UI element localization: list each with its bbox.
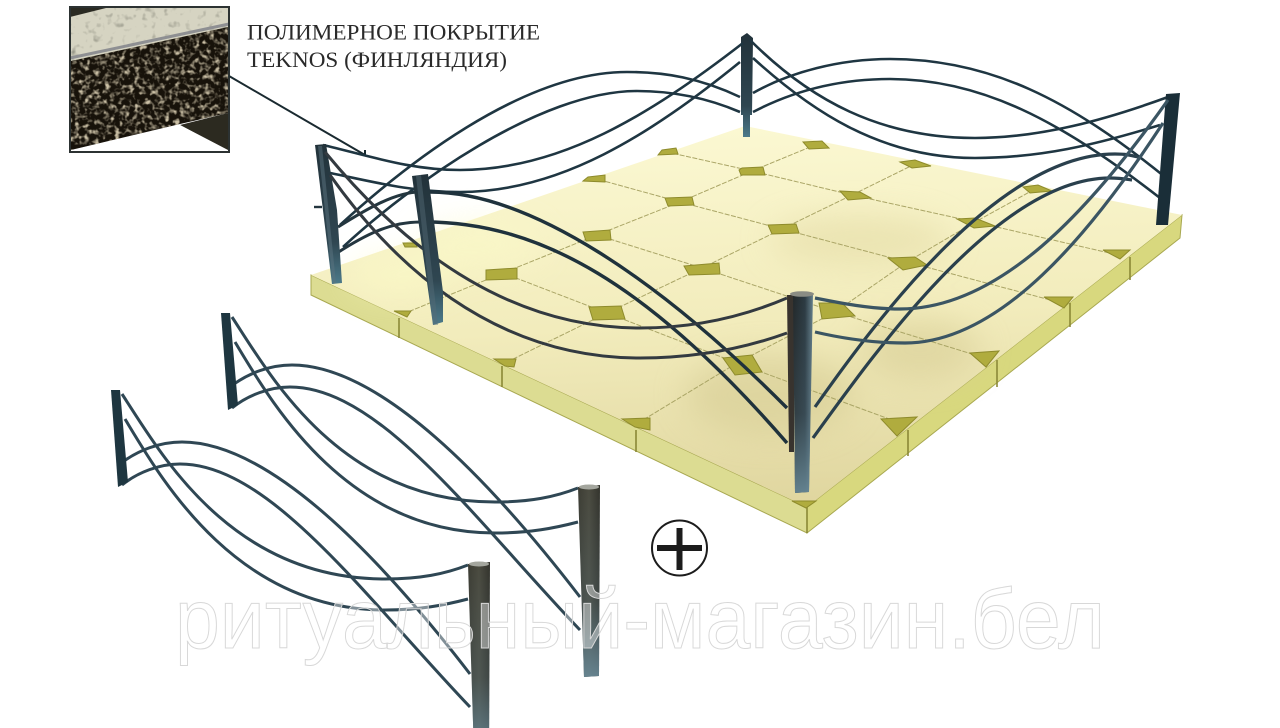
fence: back left section [323, 43, 743, 247]
left corner post [315, 144, 342, 284]
loose fence section lower [111, 390, 490, 728]
tile surface [311, 126, 1182, 507]
fence: left side section [314, 192, 420, 253]
plinth side faces [311, 215, 1182, 533]
plinth with tiles [311, 126, 1182, 533]
tile inserts [394, 141, 1130, 508]
loose fence section upper [221, 313, 600, 677]
plus sign icon [652, 520, 707, 576]
front post [412, 174, 443, 325]
section right post [578, 484, 600, 677]
far corner post [741, 33, 753, 137]
right corner post [1156, 93, 1180, 225]
caption: polymer coating [247, 20, 540, 72]
section left bracket [221, 313, 238, 410]
caption: polymer coating: ПОЛИМЕРНОЕ ПОКРЫТИЕ [247, 20, 540, 44]
fence: front right section [813, 100, 1168, 438]
callout line [229, 76, 365, 155]
near corner post [787, 291, 814, 493]
tile joints [403, 145, 1118, 423]
fence: front left section [325, 152, 787, 443]
seams in plinth [399, 257, 1130, 533]
tile shading [350, 215, 980, 435]
section wires [230, 317, 580, 630]
watermark url: ритуальный-магазин.бел [175, 572, 1105, 666]
fence: back right section [750, 40, 1168, 198]
inset: polymer coating texture [70, 7, 229, 152]
caption: polymer coating: TEKNOS (ФИНЛЯНДИЯ) [247, 47, 507, 72]
